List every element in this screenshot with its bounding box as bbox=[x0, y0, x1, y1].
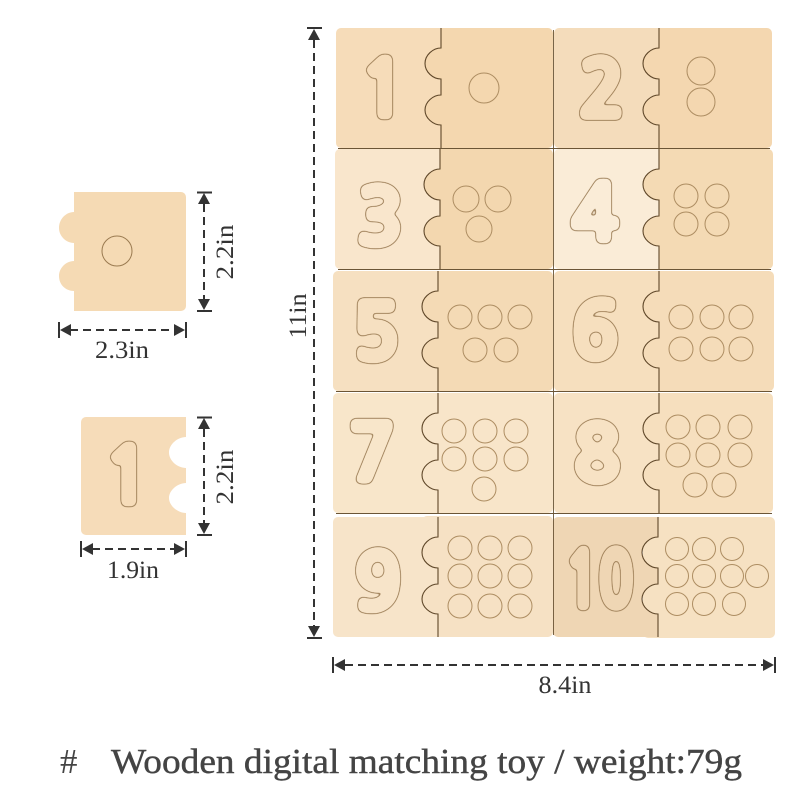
card 3 bbox=[335, 149, 553, 269]
caption hash: # bbox=[60, 742, 78, 781]
width label: 2.3in bbox=[95, 337, 150, 364]
width arrow 1.9in bbox=[81, 541, 186, 557]
card 1 bbox=[336, 28, 553, 148]
card 4: 4 bbox=[572, 177, 618, 252]
dot circle bbox=[102, 236, 132, 266]
card 9 bbox=[333, 516, 553, 637]
card 5 bbox=[333, 271, 553, 391]
card 10: 10 bbox=[565, 544, 633, 619]
height arrow 2.2in bbox=[197, 192, 212, 311]
height label 11in: 11in bbox=[285, 293, 312, 338]
width label 8.4in: 8.4in bbox=[538, 672, 592, 699]
card 6: 6 bbox=[572, 295, 618, 370]
card 8 bbox=[554, 393, 773, 513]
dot piece bbox=[59, 192, 186, 311]
caption: Wooden digital matching toy / weight:79g bbox=[111, 742, 742, 781]
card 4 bbox=[554, 149, 773, 269]
height label: 2.2in bbox=[212, 449, 239, 504]
panel: puzzle cards bbox=[333, 28, 775, 638]
card 10 bbox=[553, 517, 775, 638]
height arrow 2.2in bbox=[197, 418, 212, 535]
card 3: 3 bbox=[357, 181, 403, 256]
card 6 bbox=[554, 271, 774, 391]
card 1: 1 bbox=[360, 53, 406, 128]
width arrow 2.3in bbox=[59, 322, 186, 338]
card 8: 8 bbox=[574, 418, 620, 493]
number piece bbox=[81, 417, 186, 535]
height arrow 11in bbox=[307, 28, 322, 638]
card 2 bbox=[554, 28, 772, 148]
card 7: 7 bbox=[349, 417, 395, 492]
number 1 outline: 1 bbox=[104, 440, 150, 515]
panel: left piece dimensions bbox=[59, 192, 239, 364]
card 5: 5 bbox=[353, 296, 399, 371]
card 2: 2 bbox=[579, 53, 625, 128]
card 7 bbox=[333, 393, 553, 513]
card 9: 9 bbox=[355, 546, 401, 621]
panel: number piece dimensions bbox=[81, 417, 239, 584]
height label: 2.2in bbox=[212, 224, 239, 280]
width label: 1.9in bbox=[107, 557, 160, 584]
width arrow 8.4in bbox=[333, 657, 775, 673]
